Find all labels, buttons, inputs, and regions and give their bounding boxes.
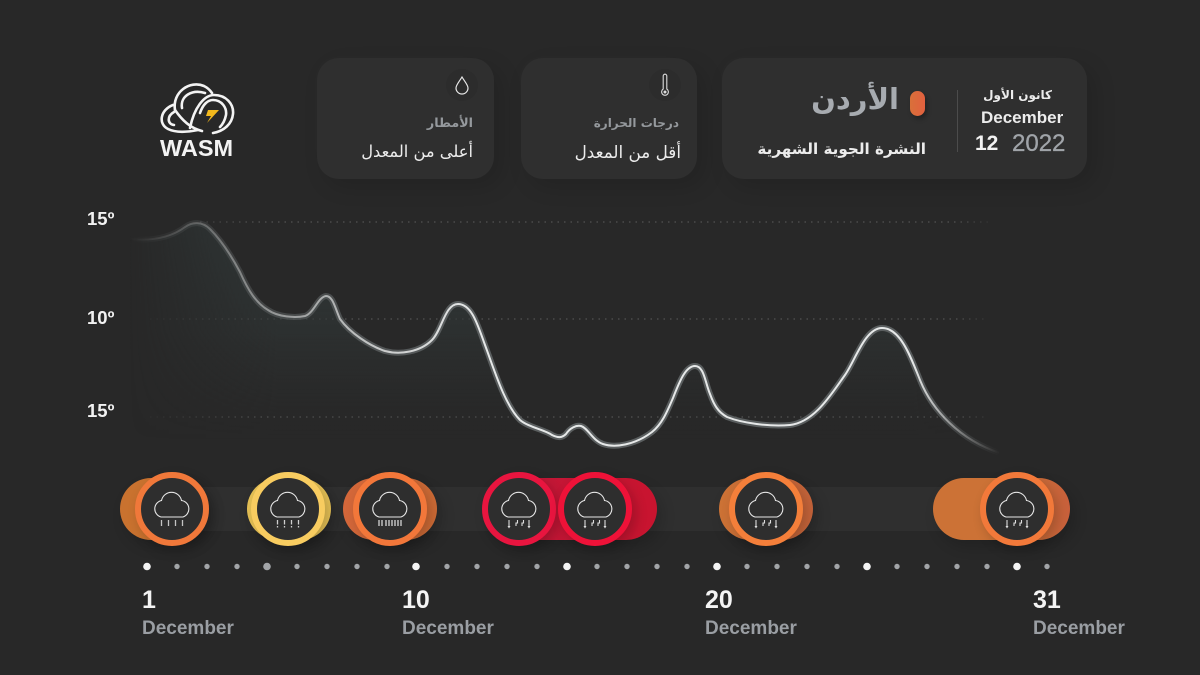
date: day: 12 [975, 132, 998, 155]
day number: 31 [1033, 586, 1061, 614]
event bar [120, 478, 208, 540]
month: December [1033, 618, 1125, 639]
curve line [130, 223, 1000, 453]
date label: 20 December [705, 586, 797, 639]
day dots [143, 562, 1050, 570]
month: December [402, 618, 494, 639]
line chart: temperature [139, 220, 996, 452]
date: December: December [981, 108, 1063, 127]
axis label: bottom: 15º [87, 400, 114, 421]
event bar [343, 478, 437, 540]
weather event 3 [343, 472, 437, 548]
rainfall value: أعلى من المعدل [361, 142, 473, 161]
date: Arabic month: كانون الأول [983, 88, 1052, 102]
title: Jordan: الأردن [811, 82, 899, 116]
icon: cloud logo mark [160, 83, 234, 134]
subtitle: monthly bulletin: النشرة الجوية الشهرية [757, 140, 926, 158]
weather event 6 [933, 472, 1070, 548]
panel: rainfall [317, 58, 494, 179]
axis label: top: 15º [87, 208, 114, 229]
icon: storm cloud [729, 472, 803, 546]
day number: 20 [705, 586, 733, 614]
icon: water drop [455, 76, 469, 95]
icon: cloud with rain [135, 472, 209, 546]
date label: 10 December [402, 586, 494, 639]
icon: cloud with heavy rain [353, 472, 427, 546]
logo: WASM [160, 83, 234, 161]
weather event 5 [719, 472, 813, 548]
weather event 2 [247, 472, 332, 548]
date label: 31 December [1033, 586, 1125, 639]
temperature label: درجات الحرارة [594, 116, 679, 130]
axis label: middle: 10º [87, 307, 114, 328]
icon: storm cloud one [482, 472, 556, 546]
divider [957, 90, 958, 152]
day number: 1 [142, 586, 156, 614]
month: December [142, 618, 234, 639]
date: year: 2022 [1012, 130, 1065, 157]
event bar [719, 478, 813, 540]
icon: cloud with drizzle [251, 472, 325, 546]
temperature value: أقل من المعدل [575, 142, 681, 162]
date label: 1 December [142, 586, 234, 639]
icon: storm cloud two [558, 472, 632, 546]
area under curve [207, 232, 882, 334]
panel: temperature [521, 58, 697, 179]
timeline track [130, 487, 1010, 531]
event bar [490, 478, 657, 540]
weather event 4: red storm span [482, 472, 657, 548]
panel: title and date [722, 58, 1087, 179]
day number: 10 [402, 586, 430, 614]
event bar [933, 478, 1070, 540]
month: December [705, 618, 797, 639]
logo wordmark: WASM [160, 135, 233, 161]
weather event 1 [120, 472, 213, 548]
icon: storm cloud [980, 472, 1054, 546]
event bar [247, 478, 331, 540]
icon: thermometer [661, 74, 669, 96]
icon: orange marker [910, 91, 925, 116]
rainfall label: الأمطار [427, 115, 473, 130]
